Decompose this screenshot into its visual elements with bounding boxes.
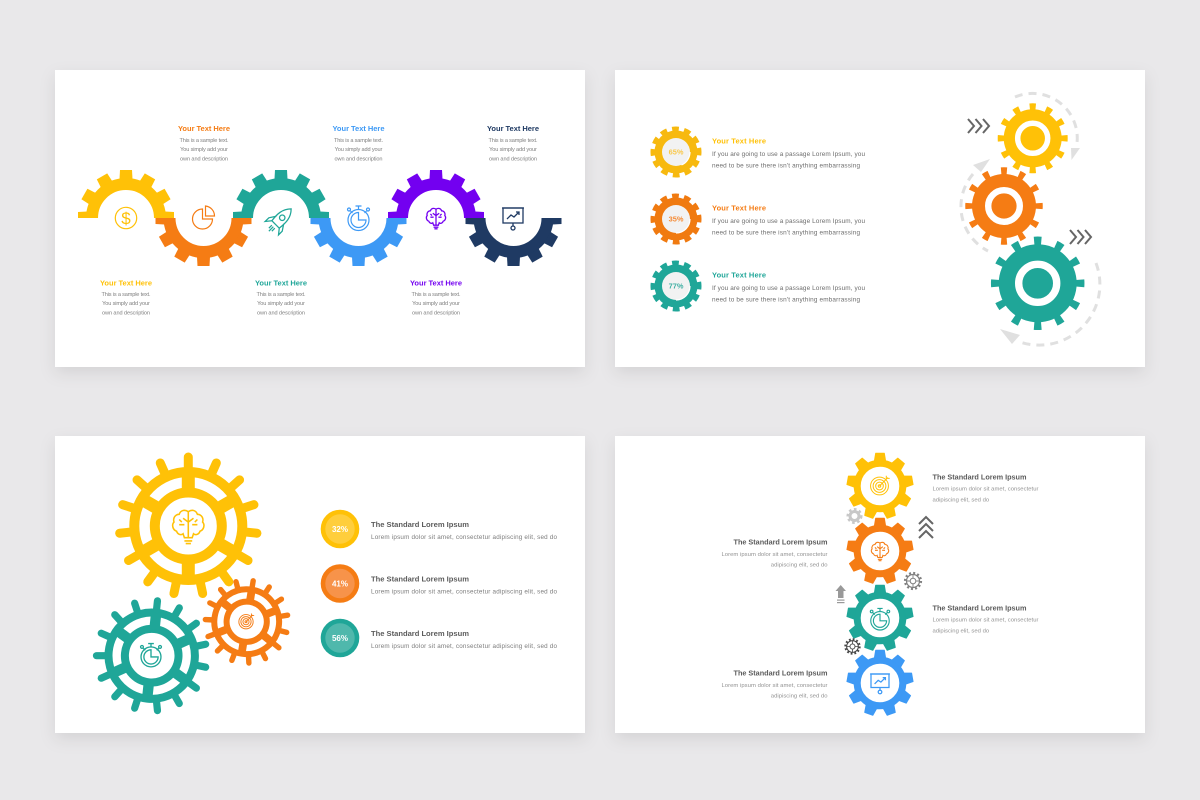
icon: rocket [262,202,298,238]
arrowheads [973,148,1080,344]
text: navy step: Your Text Here [487,124,539,133]
gear blue [847,650,913,716]
text: blue step: own and description [334,156,382,162]
icon: outline cog right [905,573,921,589]
text: first row [371,520,557,541]
gear yellow large [120,457,257,593]
gear teal [847,585,913,651]
text: navy step [487,124,539,162]
text: navy step: own and description [489,156,537,162]
gear stat 77% [653,263,699,309]
text: yellow step: This is a sample text. [102,292,151,298]
icon: target [871,476,890,495]
gear yellow [1001,107,1064,170]
text: lower right: The Standard Lorem Ipsum [932,604,1027,613]
text: second row: The Standard Lorem Ipsum [371,574,469,584]
panel: mechanical gears with list [55,436,585,733]
text: blue step: Your Text Here [332,124,384,133]
icon: stopwatch [870,608,890,630]
text: teal step: This is a sample text. [256,292,306,298]
gear teal [995,241,1080,326]
text: first row: The Standard Lorem Ipsum [371,520,469,529]
text: navy step: This is a sample text. [488,138,538,144]
icon: presentation board [502,208,524,230]
panel: vertical gear stack [615,436,1145,733]
text: top right: Lorem ipsum dolor sit amet, consectetur [932,486,1039,492]
text: navy step: You simply add your [489,147,537,153]
text: third item: If you are going to use a passage Lorem Ipsum, you [712,285,865,292]
icon: brain bulb [871,542,889,561]
gear stat 35% [653,196,699,242]
stat 41%: 41% [332,579,348,588]
text: teal step: own and description [257,311,305,317]
text: second item [712,204,865,237]
text: yellow step: Your Text Here [100,278,152,287]
text: first item: need to be sure there isn't anything embarrassing [712,163,860,170]
icon: stopwatch [348,206,370,230]
text: purple step: Your Text Here [410,278,462,287]
text: yellow step [100,278,152,317]
text: upper left: adipiscing elit, sed do [771,563,828,569]
text: first item [712,136,865,170]
text: purple step: own and description [412,311,460,317]
stat 56% [321,619,359,657]
stat 41% [321,564,359,603]
text: orange step [178,124,230,162]
text: lower right [932,604,1039,634]
text: upper left [722,538,828,569]
text: lower left: adipiscing elit, sed do [771,694,828,700]
gear stat 65%: 65% [669,148,684,157]
gear orange [847,518,913,584]
text: second row: Lorem ipsum dolor sit amet, consectetur adipiscing elit, sed do [371,589,557,596]
icon: presentation board [870,674,890,694]
gear teal [91,595,212,715]
text: second item: Your Text Here [712,204,766,212]
text: lower left: The Standard Lorem Ipsum [734,669,828,678]
text: first item: Your Text Here [712,136,766,146]
text: first item: If you are going to use a passage Lorem Ipsum, you [712,151,865,158]
text: purple step: You simply add your [412,301,460,307]
icon: chevrons top [968,119,989,133]
gear stat 35%: 35% [669,215,684,224]
text: upper left: Lorem ipsum dolor sit amet, consectetur [722,552,828,558]
stat 32%: 32% [332,525,348,534]
gear stat 65% [653,129,699,175]
icon: brain bulb [426,208,446,229]
icon: dollar coin: $ [121,209,131,228]
text: teal step: You simply add your [257,301,305,307]
text: lower left [722,669,828,700]
dashed arc arrows [961,93,1100,345]
text: upper left: The Standard Lorem Ipsum [734,538,828,547]
icon: dollar coin [115,207,137,229]
text: yellow step: You simply add your [102,301,150,307]
text: third row [371,629,557,650]
text: lower left: Lorem ipsum dolor sit amet, consectetur [722,683,828,689]
stat 56%: 56% [332,634,348,643]
stat 32% [321,510,359,548]
icon: up arrow [836,585,846,603]
text: yellow step: own and description [102,311,150,317]
gear orange [969,171,1039,241]
icon: brain bulb [173,510,204,544]
text: teal step: Your Text Here [255,278,307,287]
icon: chevrons bottom [1070,230,1091,244]
gear stat 77%: 77% [669,282,684,291]
text: third item [712,270,865,304]
text: third item: need to be sure there isn't anything embarrassing [712,297,860,304]
icon: up chevrons [919,517,933,538]
text: orange step: This is a sample text. [180,138,229,144]
text: blue step [332,124,384,162]
gear yellow [847,453,913,519]
icon: outline cog left [845,639,860,654]
icon: stopwatch [141,644,161,667]
text: lower right: adipiscing elit, sed do [932,628,990,634]
text: second row [371,574,557,596]
text: orange step: own and description [180,156,228,162]
text: teal step [255,278,307,317]
icon: target [239,614,254,629]
text: purple step: This is a sample text. [412,292,461,298]
text: orange step: You simply add your [180,147,228,153]
text: top right: The Standard Lorem Ipsum [932,472,1027,482]
text: blue step: You simply add your [335,147,382,153]
text: top right [932,472,1039,503]
text: second item: need to be sure there isn't anything embarrassing [712,230,860,237]
text: second item: If you are going to use a passage Lorem Ipsum, you [712,218,865,225]
text: lower right: Lorem ipsum dolor sit amet, consectetur [932,618,1039,624]
text: third row: Lorem ipsum dolor sit amet, consectetur adipiscing elit, sed do [371,643,557,650]
panel: percentage gears and meshing gears [615,70,1145,367]
wave chart of half gears [78,170,562,266]
text: third row: The Standard Lorem Ipsum [371,629,469,638]
icon: pie chart [192,206,215,229]
text: purple step [410,278,462,317]
icon: small grey gear [848,510,861,522]
text: third item: Your Text Here [712,270,766,280]
gear orange [200,574,294,668]
panel: wave of half gears [55,70,585,367]
text: orange step: Your Text Here [178,124,230,133]
text: top right: adipiscing elit, sed do [932,497,990,503]
text: first row: Lorem ipsum dolor sit amet, consectetur adipiscing elit, sed do [371,534,557,541]
text: blue step: This is a sample text. [334,138,383,144]
